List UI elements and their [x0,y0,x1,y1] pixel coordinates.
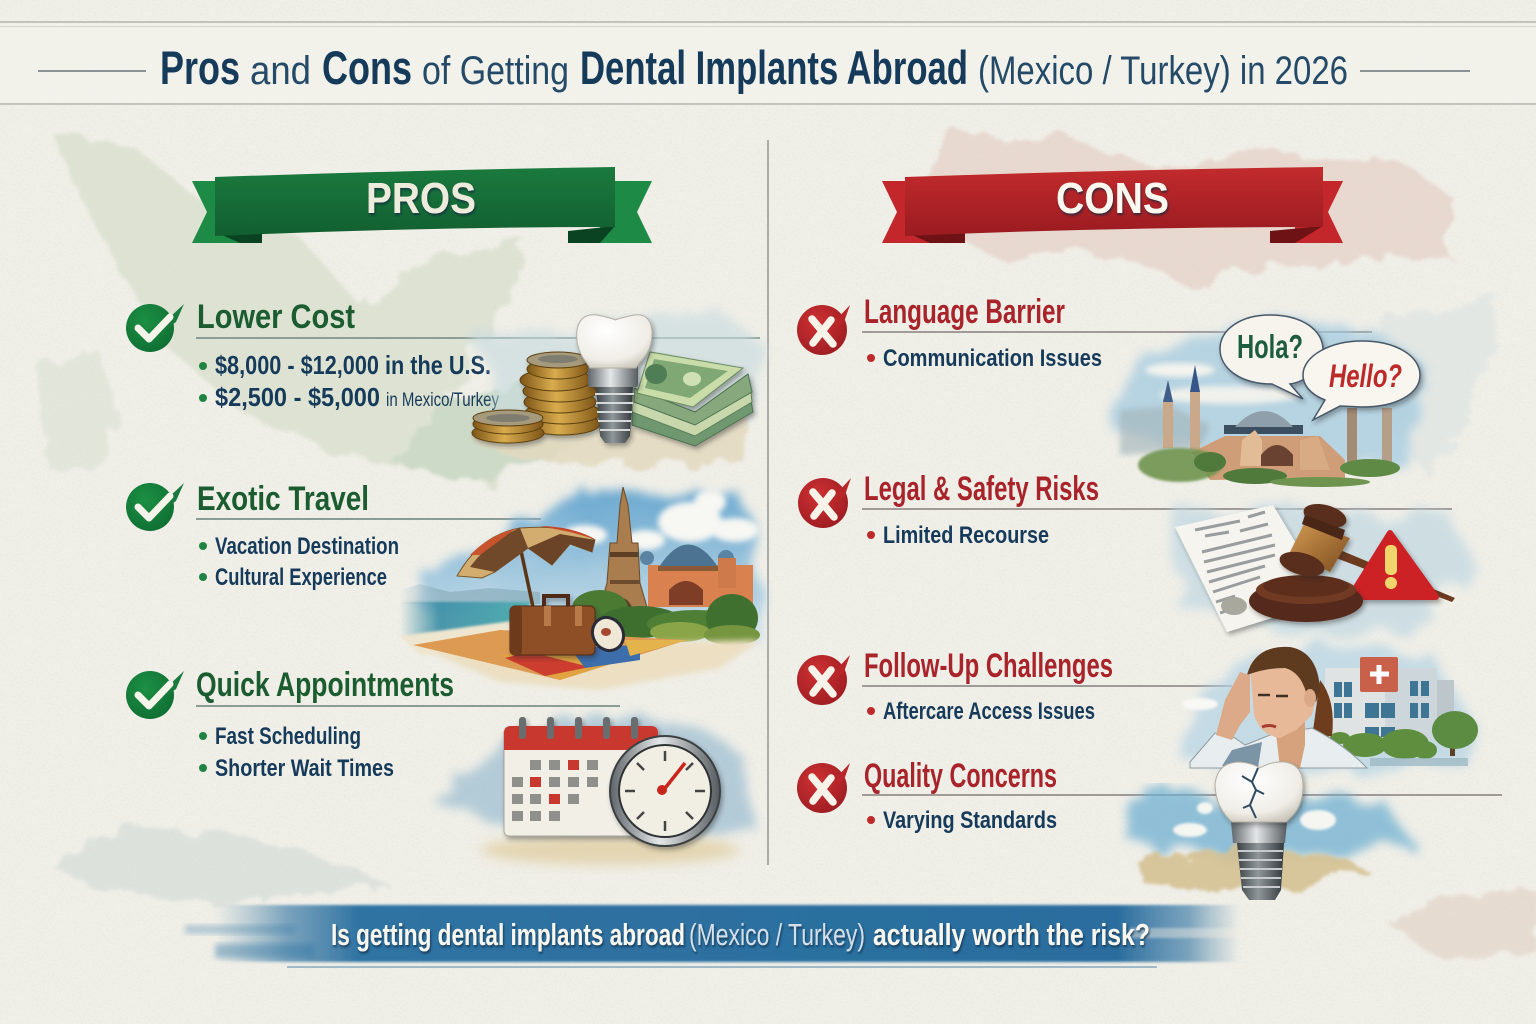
bullet [867,354,875,362]
icon: check [126,483,184,531]
warning triangle [1350,533,1436,597]
clouds [563,490,759,550]
footer question banner [185,905,1240,968]
title bar [0,21,1536,105]
hat [587,612,629,656]
illustration: calendar and clock [430,712,750,865]
con: legal and safety: Limited Recourse [883,522,1049,549]
greenery [572,590,760,645]
map: lower right faded land [1390,890,1536,960]
title text: (Mexico / Turkey) in 2026 [978,49,1348,93]
mosque [640,544,753,607]
wash [480,315,760,420]
bullets: Cultural Experience [215,564,387,591]
sky [420,490,758,640]
beach towel [413,630,687,680]
bullets: Shorter Wait Times [215,755,394,782]
calendar [504,717,658,836]
bullets: Vacation Destination [215,533,399,560]
bullets: in Mexico/Turkey [386,390,499,411]
tower [600,487,647,607]
implant [577,315,652,443]
map: faded right wash [1380,295,1500,480]
con: language barrier [797,293,1372,372]
hospital [1325,657,1478,766]
pro: lower cost [126,298,760,412]
pro: exotic travel [126,480,541,591]
sky wash [1120,318,1430,470]
map: Mexico [40,132,600,485]
title text [160,41,1348,94]
icon: cross [797,305,850,355]
banner: CONS [882,167,1343,243]
speech bubble: Hola [1220,315,1323,399]
con: follow-up challenges [797,647,1232,725]
gavel base [1249,575,1363,622]
footer question banner: Is getting dental implants abroad [331,917,685,952]
bullets [199,723,394,782]
illustration: document, gavel, warning [1175,500,1470,640]
bullets [199,533,399,591]
mosque [1138,365,1400,487]
bullet [867,816,875,824]
title text: Pros [160,41,240,94]
cash stack [632,352,753,446]
footer question banner: actually worth the risk? [873,917,1150,952]
icon: cross [797,763,850,813]
title text: Dental Implants Abroad [580,41,968,94]
banner: PROS: PROS [366,174,476,223]
bullet [867,707,875,715]
coins [472,352,601,443]
clock [610,736,720,846]
heading: Exotic Travel [197,480,369,518]
illustration: worried woman and hospital [1180,645,1478,768]
center divider [767,140,769,865]
bullets: Fast Scheduling [215,723,361,750]
bullets [199,350,499,412]
speech bubble: Hello: Hello? [1329,358,1402,394]
illustration: cracked tooth implant [1130,762,1410,900]
bullets: $2,500 - $5,000 [215,382,380,412]
speech bubble: Hello [1303,341,1420,420]
con: language barrier: Communication Issues [883,345,1102,372]
sand [430,640,760,690]
heading: Quick Appointments [196,666,454,704]
woman [1190,647,1367,768]
icon: check [126,671,184,719]
pro: quick appointments [126,666,620,782]
footer question banner: (Mexico / Turkey) [689,917,865,952]
gavel handle [1336,550,1455,602]
document [1175,505,1330,632]
suitcase [510,596,595,655]
illustration: coins, implant and cash [470,315,760,465]
bullet [867,531,875,539]
con: legal and safety [798,470,1452,549]
con: follow-up challenges: Aftercare Access Issues [883,698,1095,725]
con: quality concerns [797,757,1502,834]
banner: CONS: CONS [1056,174,1169,223]
heading: Legal & Safety Risks [864,470,1099,508]
con: quality concerns: Varying Standards [883,807,1057,834]
icon: cross [798,478,851,528]
mountains and sea [400,584,540,604]
title text: and [250,49,311,93]
bullets: $8,000 - $12,000 in the U.S. [215,350,491,380]
banner: PROS [192,167,652,243]
illustration: mosque and speech bubbles [1120,315,1430,487]
heading: Quality Concerns [864,757,1057,795]
icon: cross [797,655,850,705]
title text: of Getting [422,49,569,93]
title text: Cons [322,41,412,94]
heading: Follow-Up Challenges [864,647,1113,685]
umbrella [457,526,595,607]
heading: Lower Cost [197,298,355,336]
icon: check [126,304,184,352]
speech bubble: Hola: Hola? [1237,328,1303,365]
heading: Language Barrier [864,293,1065,331]
map: Turkey [905,128,1455,290]
map: lower left faded land [50,825,390,905]
illustration: beach travel scene [400,487,760,690]
gavel head [1277,500,1350,581]
